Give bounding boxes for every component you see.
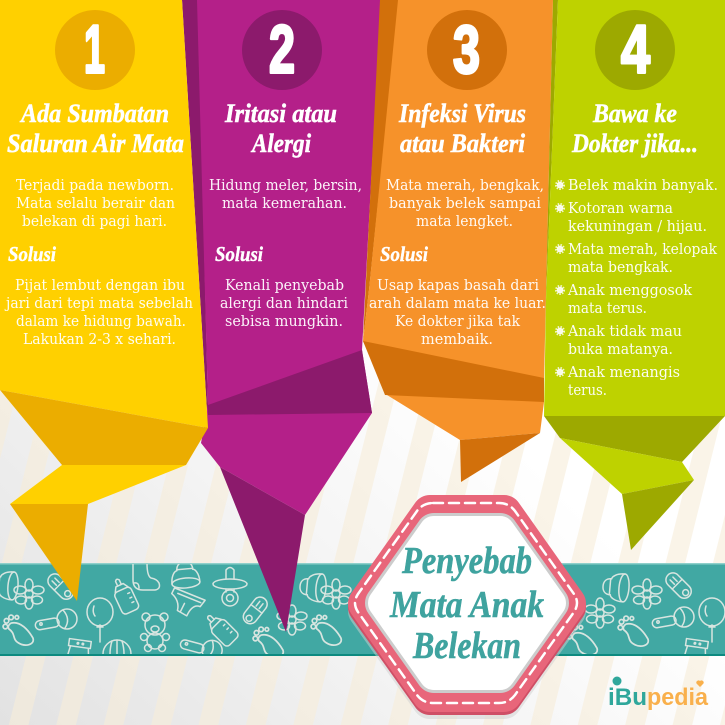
title text: Belekan	[412, 625, 521, 667]
title text: Mata Anak	[389, 584, 544, 626]
panel: orange column 3	[363, 0, 553, 482]
text block: column 2 solution: Kenali penyebab	[225, 276, 344, 294]
text block: column 2 solution	[220, 276, 348, 330]
text block: column 3 description: banyak belek sampai	[389, 194, 541, 212]
heading column 2: Alergi	[250, 129, 312, 158]
text block: column 1 description: Terjadi pada newborn.	[16, 176, 174, 194]
text block: column 2 solution: alergi dan hindari	[220, 294, 348, 312]
text block: column 3 description: mata lengket.	[416, 212, 513, 230]
bullet list: column 4: Belek makin banyak.	[568, 176, 718, 194]
title text: Penyebab	[401, 540, 532, 582]
bullet list: column 4: mata terus.	[568, 299, 647, 317]
heading column 2	[224, 99, 337, 158]
number badge 1: 1	[84, 12, 105, 88]
text block: column 3 solution: membaik.	[421, 330, 493, 348]
logo: iBupedia: iBu	[608, 684, 647, 711]
number badge 3	[427, 10, 507, 90]
panel: yellow column 1	[0, 0, 208, 601]
text block: column 2 description: mata kemerahan.	[222, 194, 347, 212]
bullet list: column 4: Anak menangis	[567, 363, 680, 381]
number badge 1	[55, 10, 135, 90]
number badge 2	[242, 10, 322, 90]
text block: column 3 solution: Ke dokter jika tak	[395, 312, 521, 330]
logo: iBupedia	[608, 676, 709, 711]
bullet list: column 4	[556, 176, 718, 399]
text block: column 2 solution: sebisa mungkin.	[225, 312, 343, 330]
heading column 3: Infeksi Virus	[398, 99, 526, 128]
heading column 1	[7, 99, 184, 158]
bullet list: column 4: Anak tidak mau	[567, 322, 682, 340]
text block: column 1 solution: Pijat lembut dengan ibu	[15, 276, 185, 294]
text block: column 1 description: belekan di pagi hari.	[22, 212, 167, 230]
bullet list: column 4: Anak menggosok	[567, 281, 693, 299]
bullet list: column 4: kekuningan / hijau.	[568, 217, 707, 235]
panel: magenta column 2	[182, 0, 381, 632]
number badge 3: 3	[453, 12, 480, 88]
bullet list: column 4: terus.	[568, 381, 607, 399]
bullet list: column 4: mata bengkak.	[568, 258, 673, 276]
heading column 2: Iritasi atau	[224, 99, 337, 128]
panel: green column 4	[544, 0, 725, 550]
heading column 3	[398, 99, 526, 158]
subheading: column 2 solusi: Solusi	[215, 242, 263, 266]
subheading: column 3 solusi: Solusi	[380, 242, 428, 266]
number badge 4: 4	[621, 12, 650, 88]
text block: column 1 solution	[4, 276, 193, 348]
text block: column 3 solution	[369, 276, 546, 348]
heading column 4: Bawa ke	[592, 99, 677, 128]
heading column 4	[571, 99, 698, 158]
text block: column 3 description: Mata merah, bengkak,	[386, 176, 544, 194]
text block: column 3 description	[386, 176, 544, 230]
text block: column 1 solution: Lakukan 2-3 x sehari.	[23, 330, 176, 348]
heading column 1: Ada Sumbatan	[19, 99, 169, 128]
text block: column 1 solution: dalam ke hidung bawah.	[16, 312, 186, 330]
text block: column 1 solution: jari dari tepi mata sebelah	[4, 294, 193, 312]
heading column 3: atau Bakteri	[400, 129, 526, 158]
title hexagon badge	[355, 503, 577, 703]
text block: column 3 solution: arah dalam mata ke luar.	[369, 294, 546, 312]
logo: iBupedia: pedia	[647, 684, 709, 711]
text block: column 2 description	[209, 176, 362, 212]
title text	[389, 540, 544, 667]
number badge 4	[595, 10, 675, 90]
text block: column 1 description: Mata selalu berair dan	[16, 194, 175, 212]
heading column 4: Dokter jika...	[571, 129, 698, 158]
text block: column 2 description: Hidung meler, bersin,	[209, 176, 362, 194]
heading column 1: Saluran Air Mata	[7, 129, 184, 158]
bullet list: column 4: Kotoran warna	[568, 199, 673, 217]
number badge 2: 2	[269, 12, 295, 88]
text block: column 3 solution: Usap kapas basah dari	[377, 276, 539, 294]
bullet list: column 4: buka matanya.	[568, 340, 673, 358]
subheading: column 1 solusi: Solusi	[8, 242, 56, 266]
text block: column 1 description	[16, 176, 175, 230]
ribbon band with baby pattern	[0, 563, 725, 656]
